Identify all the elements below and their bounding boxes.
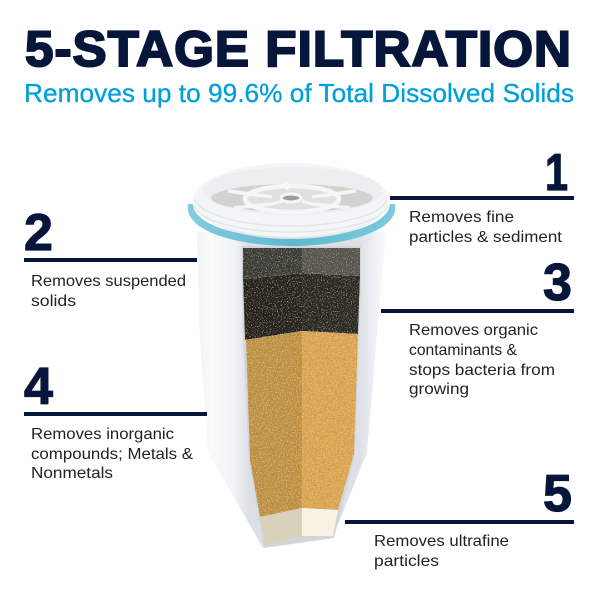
cutaway frame [241,246,361,548]
lid rim [193,163,389,237]
number 2: 2 [24,204,53,262]
lid opening [203,167,383,215]
stage 4 description: Removes inorganic [31,426,174,443]
stage 3 description: Removes organic [409,322,538,339]
stage 4 description: compounds; Metals & [31,446,193,463]
stage 2 description: solids [31,293,76,310]
cutaway: fine particle layer [243,248,360,279]
cutaway: carbon layer [243,273,360,340]
subtitle: Removes up to 99.6% of Total Dissolved Solids [24,78,574,108]
title: 5-STAGE FILTRATION [25,21,572,77]
stage 5 callout [345,465,574,570]
stage 2 description: Removes suspended [31,273,186,290]
stage 4 callout [24,358,207,482]
filter cartridge illustration [188,163,395,548]
cutaway: orange resin layer [246,331,358,517]
stage 4 description: Nonmetals [31,465,113,482]
stage 3 description: stops bacteria from [409,362,555,379]
number 3: 3 [543,254,572,312]
stage 5 description: Removes ultrafine [374,533,509,550]
number 5: 5 [543,465,572,523]
stage 1 description: Removes fine [409,209,514,226]
number 1: 1 [545,144,568,202]
stage 3 callout [381,254,574,398]
cutaway: ultrafine base layer [260,508,338,546]
cartridge body [197,232,386,548]
blue seal ring [188,204,395,246]
lid collar [193,196,390,239]
lid wheel grille [228,182,356,212]
stage 5 description: particles [374,553,439,570]
stage 1 description: particles & sediment [409,229,563,246]
stage 2 callout [24,204,197,310]
number 4: 4 [24,358,53,416]
stage 3 description: growing [409,381,469,398]
stage 3 description: contaminants & [409,342,517,359]
stage 1 callout [390,144,574,246]
